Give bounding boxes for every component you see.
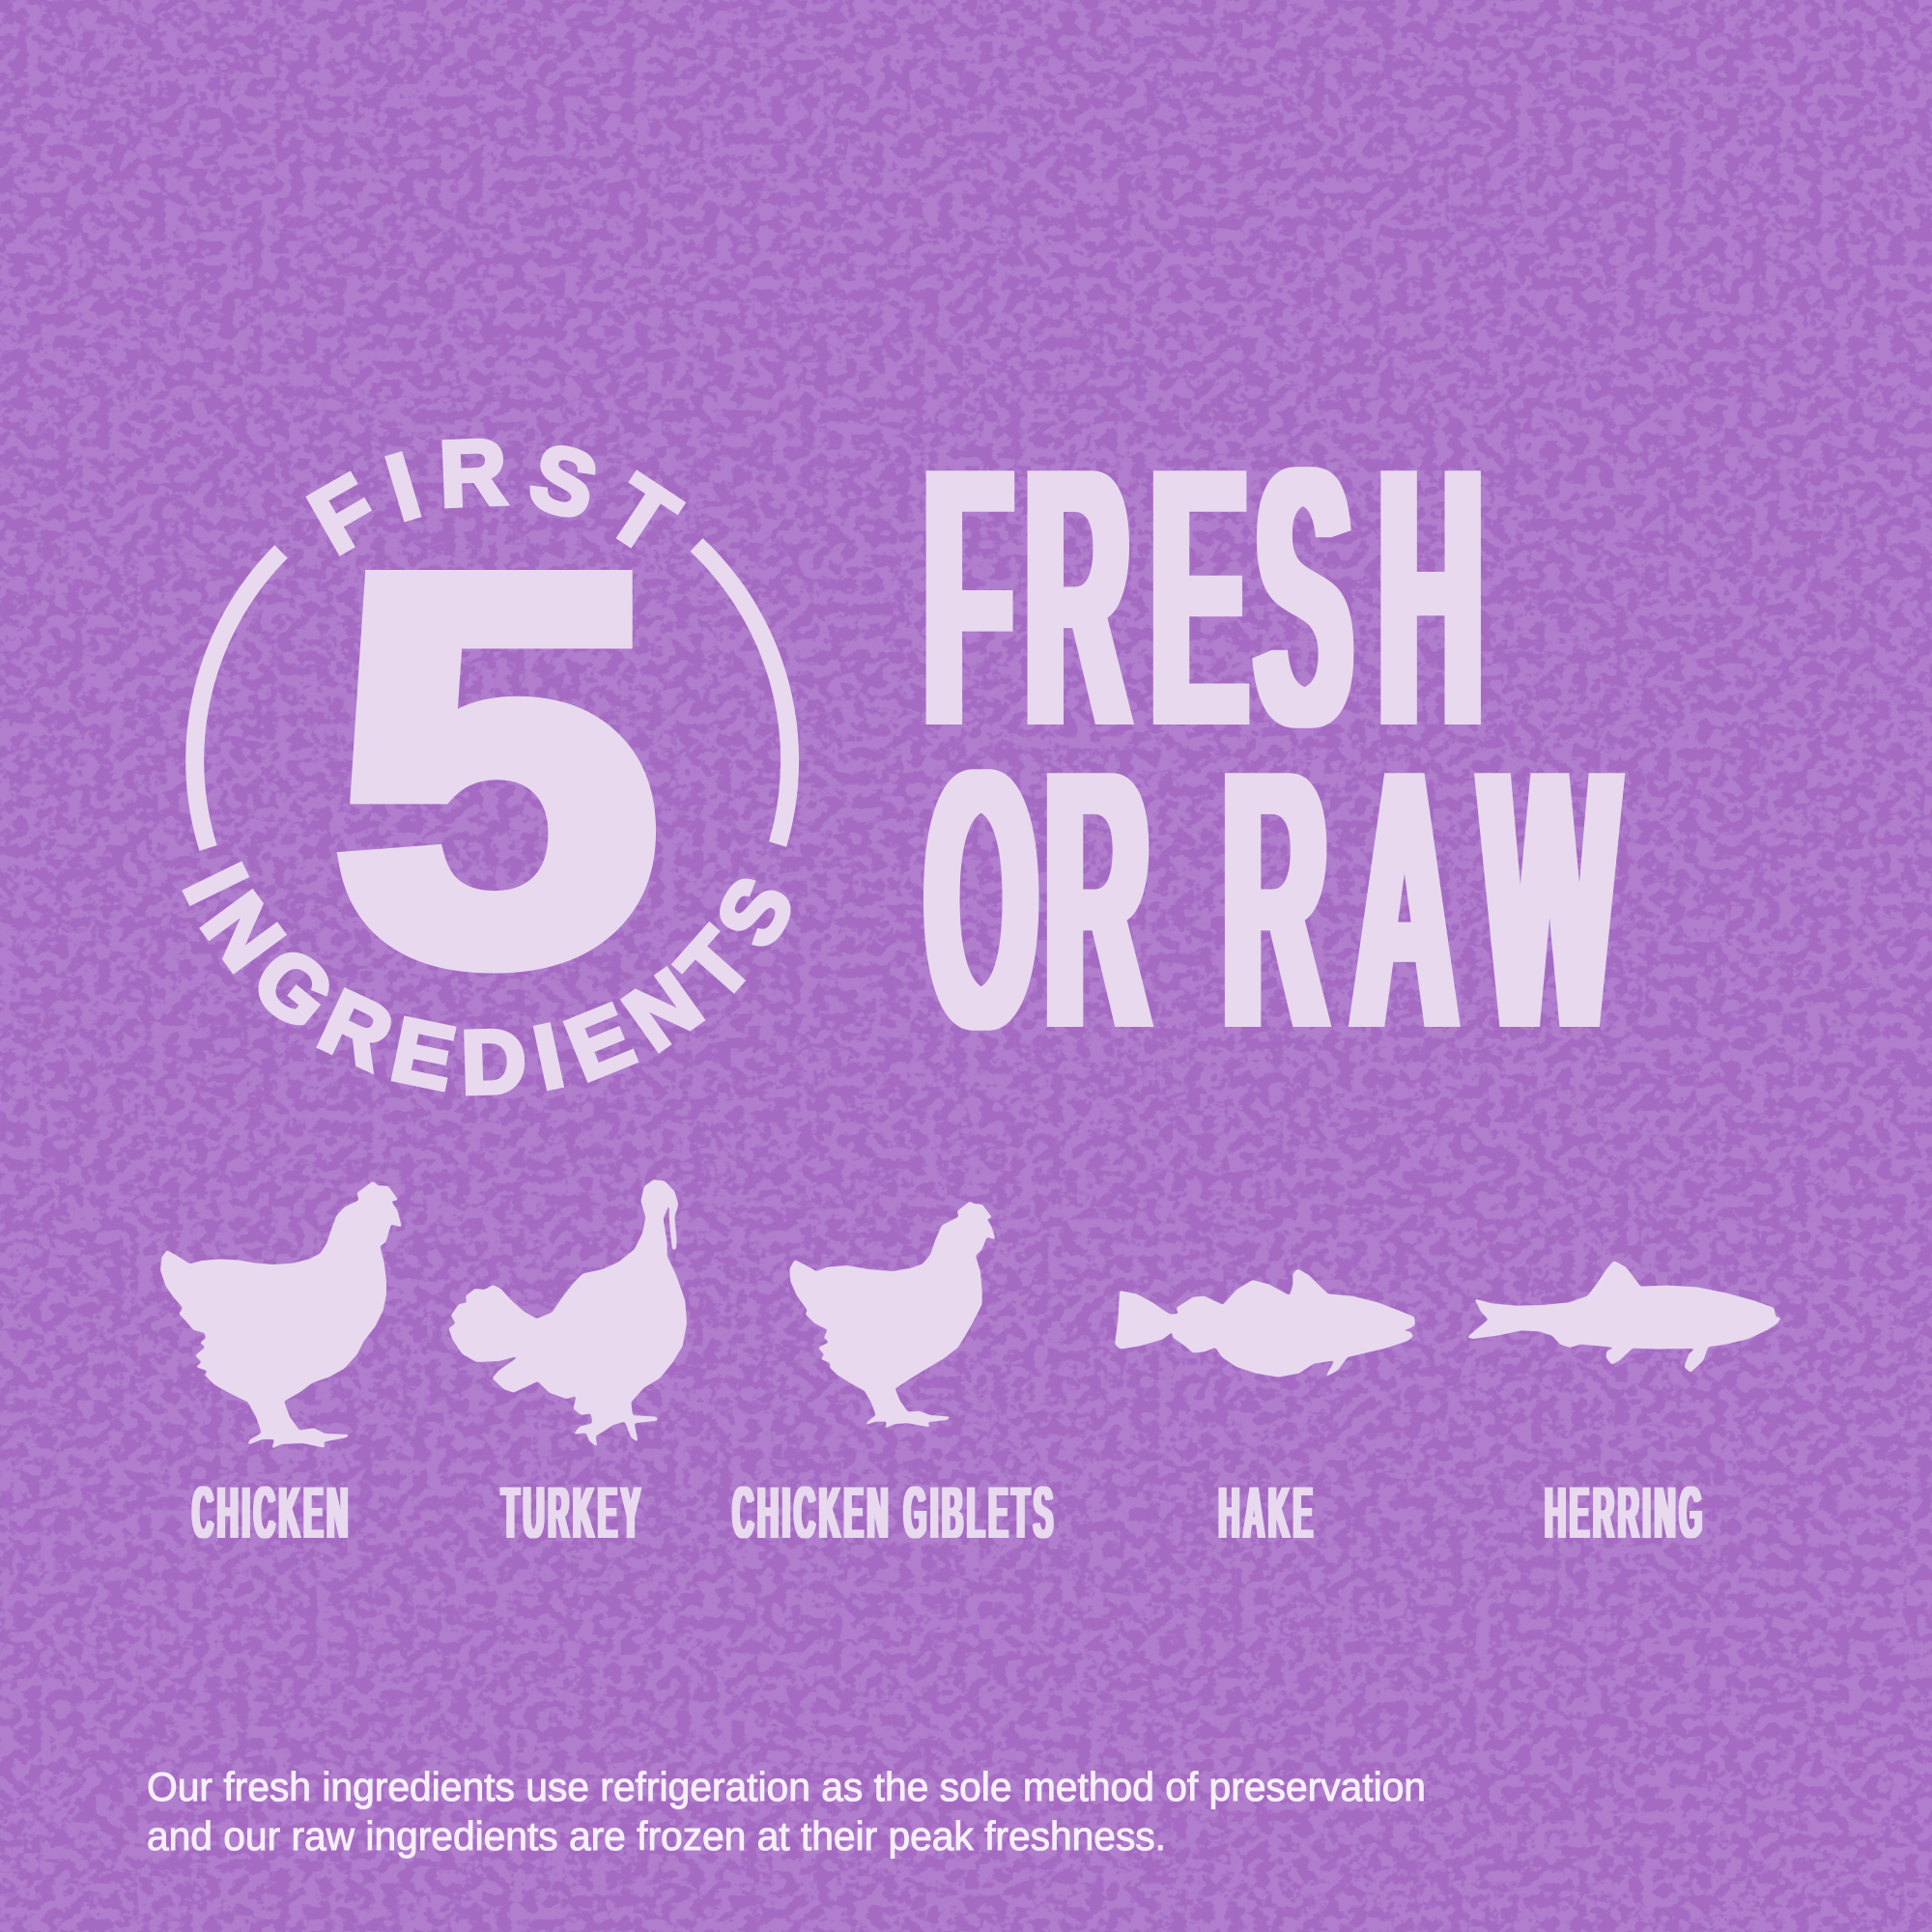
label: turkey: TURKEY [501, 1473, 644, 1554]
headline line 1: FRESH [924, 392, 1483, 804]
ring arc right [696, 545, 790, 844]
label: chicken giblets: CHICKEN GIBLETS [732, 1473, 1057, 1554]
label: hake: HAKE [1218, 1473, 1317, 1554]
icon: chicken giblets [789, 1201, 996, 1429]
ingredient icons [160, 1179, 1781, 1449]
label: herring: HERRING [1545, 1473, 1706, 1554]
footnote line 1: Our fresh ingredients use refrigeration as the sole method of preservation [147, 1764, 1426, 1809]
icon: herring [1466, 1261, 1781, 1373]
icon: turkey [448, 1179, 687, 1447]
ring arc left [195, 552, 281, 848]
headline: fresh or raw [924, 392, 1619, 1106]
footnote text [147, 1764, 1426, 1859]
badge numeral 5: 5 [333, 463, 660, 1072]
ingredient labels [192, 1473, 1706, 1554]
footnote line 2: and our raw ingredients are frozen at their peak freshness. [147, 1813, 1166, 1859]
badge text: FIRST: FIRST [305, 439, 686, 556]
icon: hake [1115, 1268, 1415, 1378]
icon: chicken [160, 1181, 402, 1449]
label: chicken: CHICKEN [192, 1473, 352, 1554]
headline line 2: OR RAW [925, 695, 1619, 1106]
badge: first 5 ingredients [182, 439, 800, 1095]
badge text: INGREDIENTS: INGREDIENTS [182, 861, 790, 1095]
